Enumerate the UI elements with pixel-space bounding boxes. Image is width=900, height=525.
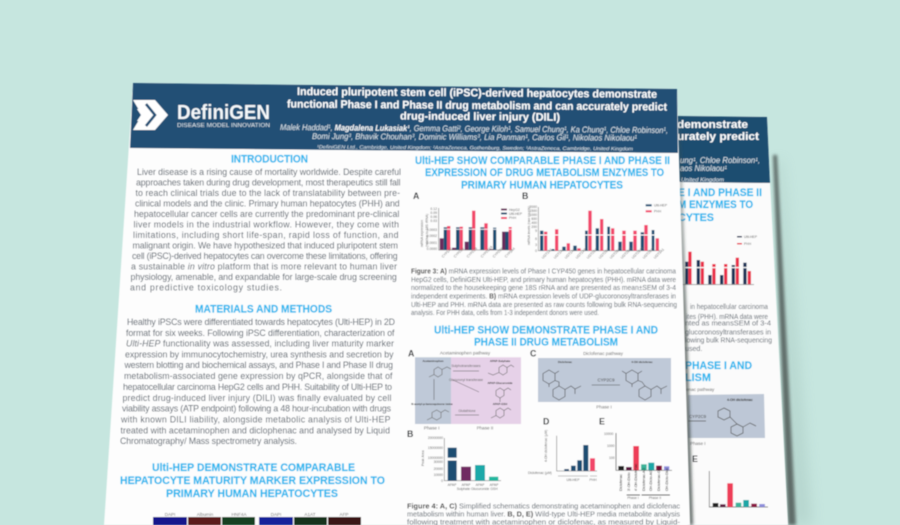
back poster caption: used. <box>685 345 702 353</box>
logo wordmark: DefiniGEN <box>177 101 270 124</box>
heading: drug metabolism <box>434 324 658 348</box>
chart B: peak area: APAP <box>490 483 499 487</box>
chart E: metabolite levels: Diclofenac <box>619 474 623 491</box>
figure 3 caption <box>411 268 677 317</box>
poster shadows <box>773 155 812 525</box>
chart B: UGT expression: 3 <box>535 243 537 247</box>
materials and methods text: Healthy iPSCs were differentiated towards hepatocytes (Ulti-HEP) in 2D <box>127 317 395 327</box>
chart B: peak area: GSH <box>490 487 498 491</box>
chart B: UGT expression: UGT3A1 <box>653 247 665 260</box>
schematic A: acetaminophen pathway: Sulphotransferases <box>451 364 481 368</box>
microscopy image row: AFP <box>340 512 348 517</box>
chart B: peak area: 0 <box>441 479 443 483</box>
poster title: Induced pluripotent stem cell (iPSC)-derived hepatocytes demonstrate <box>297 86 657 101</box>
back poster heading 2: LISM <box>685 372 711 384</box>
materials and methods text: western blotting and biochemical assays, and Phase I and Phase II drug <box>124 360 393 370</box>
chart B: peak area: Peak Area <box>421 450 425 466</box>
back poster bar chart: PHH <box>744 242 752 246</box>
schematic C: diclofenac pathway: Diclofenac pathway <box>583 351 624 356</box>
introduction text: malignant origin. We have hypothesized that induced pluripotent stem <box>132 240 398 250</box>
schematic A: acetaminophen pathway: APAP-Glucuronide <box>488 381 513 385</box>
chart A: CYP450 expression: CYP2C19 <box>480 245 493 259</box>
figure 3 caption: Figure 3: A) mRNA expression levels of Phase I CYP450 genes in hepatocellular carcinoma <box>411 268 676 276</box>
chart B: UGT expression: UGT2B7 <box>598 247 610 260</box>
schematic C: diclofenac pathway: CYP2C9 <box>597 378 615 382</box>
chart E: metabolite levels: Phase I <box>627 496 639 500</box>
chart D: diclofenac dose: Diclofenac (µM) <box>528 471 552 475</box>
chart B: UGT expression: PHH <box>654 210 662 214</box>
chart A: CYP450 expression: 0.0000 <box>427 247 437 251</box>
chart B: UGT expression: UGT1A1 <box>541 247 553 260</box>
panel: maturity markers <box>120 462 385 525</box>
chart D: diclofenac dose: PHH <box>589 478 597 482</box>
chart A: CYP450 expression: 0.06 <box>430 215 437 219</box>
back poster header: United Kingdom <box>681 178 724 184</box>
introduction text: hepatocellular cancer cells are currently the predominant pre-clinical <box>134 209 399 219</box>
back poster caption: glucoronosyltransferases in <box>685 328 771 336</box>
chart E: metabolite levels <box>599 416 672 500</box>
heading: maturity markers: PRIMARY HUMAN HEPATOCYTES <box>166 488 338 500</box>
heading: expression: PRIMARY HUMAN HEPATOCYTES <box>461 180 623 192</box>
schematic C: diclofenac pathway: C <box>530 348 537 358</box>
introduction text: to reach clinical trials due to the lack of translatability between pre- <box>136 188 400 198</box>
chart B: peak area: APAP <box>476 483 485 487</box>
materials and methods text: predict drug-induced liver injury (DILI) was finally evaluated by cell <box>122 393 392 403</box>
back poster header: urately predict <box>677 131 759 143</box>
header band <box>130 83 678 153</box>
chart B: UGT expression: 2000 <box>529 205 537 209</box>
chart D: diclofenac dose <box>528 416 597 482</box>
back poster chart E <box>692 454 768 507</box>
materials and methods text: with known DILI liability, alongside metabolic analysis of Ulti-HEP <box>120 414 391 424</box>
materials and methods text: hepatocellular carcinoma HepG2 cells and PHH. Suitability of Ulti-HEP to <box>123 382 392 392</box>
introduction text: and predictive toxicology studies. <box>130 282 282 292</box>
back poster header: ung¹, Chloe Robinson¹, <box>680 155 760 165</box>
back poster heading: M ENZYMES TO <box>678 199 753 211</box>
back poster heading <box>678 187 762 224</box>
chart B: peak area: 30000 <box>434 460 443 464</box>
back poster pathway box: enac pathway <box>686 387 715 392</box>
introduction text: a sustainable in vitro platform that is more relevant to human liver <box>131 262 397 272</box>
back poster heading 2: PHASE I AND <box>685 360 752 372</box>
materials and methods text: expression by immunocytochemistry, urea synthesis and secretion by <box>125 350 394 360</box>
chart D: diclofenac dose: 4-OH diclofenac (µM) <box>544 430 548 462</box>
panel: drug metabolism <box>407 324 681 525</box>
schematic A: acetaminophen pathway: N-acetyl-p-benzoquinone imine <box>411 402 453 406</box>
front poster <box>104 83 690 525</box>
schematic A: acetaminophen pathway: Phase II <box>477 426 493 430</box>
back poster pathway box: CYP2C9 <box>689 414 707 419</box>
chart B: UGT expression: UGT2B10 <box>609 246 622 260</box>
chart E: metabolite levels: 4'-OH-Diclofenac <box>634 464 638 491</box>
heading: drug metabolism: Ulti-HEP SHOW DEMONSTRATE PHASE I AND <box>434 324 658 336</box>
chart B: UGT expression: 200 <box>531 225 537 229</box>
schematic C: diclofenac pathway <box>530 348 671 410</box>
heading: drug metabolism: PHASE II DRUG METABOLISM <box>474 336 618 348</box>
microscopy image row: A1AT <box>304 512 316 517</box>
chart A: CYP450 expression: PHH <box>509 216 517 220</box>
chart B: peak area: 20000 <box>434 467 443 471</box>
chart E: metabolite levels: OH-Diclo-AG <box>649 470 653 491</box>
back poster header: aos Nikolaou¹ <box>680 163 727 173</box>
microscopy image row: DAPI <box>165 512 175 517</box>
poster title: drug-induced liver injury (DILI) <box>400 111 560 124</box>
chart B: UGT expression: mRNA levels (raw counts) <box>527 206 531 245</box>
chart A: CYP450 expression: 0.12 <box>430 207 437 211</box>
panel: introduction <box>130 154 401 292</box>
back poster heading 2 <box>685 360 752 384</box>
chart B: peak area: Sulphate Glucuronide <box>457 487 489 491</box>
heading: materials and methods: MATERIALS AND METHODS <box>195 304 332 316</box>
figure 3 caption: Ulti-HEP and PHH. mRNA data are presented as raw counts following bulk RNA-sequencing <box>411 301 677 309</box>
heading: maturity markers: Ulti-HEP DEMONSTRATE COMPARABLE <box>152 462 355 474</box>
schematic C: diclofenac pathway: 4-OH diclofenac <box>631 360 653 364</box>
chart A: CYP450 expression: mRNA expression <box>420 220 424 247</box>
back poster bar chart: Ulti-HEP <box>744 235 758 239</box>
schematic A: acetaminophen pathway: Glutathione <box>458 409 476 413</box>
materials and methods text: format for six weeks. Following iPSC differentiation, characterization of <box>126 328 395 338</box>
panel: materials and methods <box>120 304 395 446</box>
chart B: UGT expression: 0 <box>535 249 537 253</box>
figure 3 caption: normalized to the housekeeping gene 18S rRNA and are presented as mean±SEM of 3-4 <box>411 284 676 292</box>
chart E: metabolite levels: 10000 <box>604 432 614 436</box>
schematic A: acetaminophen pathway: Acetaminophen <box>423 359 444 363</box>
chart B: peak area: 15000000 <box>428 446 443 450</box>
introduction text: physiology, amenable, and expandable for large-scale drug screening <box>130 272 397 282</box>
figure 3 caption: independent experiments. B) mRNA expression levels of UDP-glucoronosyltransferases in <box>411 292 676 300</box>
back poster bar chart <box>682 235 758 285</box>
chart A: CYP450 expression: CYP3A4 <box>504 247 516 259</box>
chart A: CYP450 expression: 0.03 <box>430 219 437 223</box>
chart E: metabolite levels: Diclofenac-Gluc <box>657 465 661 491</box>
back poster header: demonstrate <box>677 119 748 131</box>
microscopy image row: DAPI <box>271 512 281 517</box>
microscopy image row <box>153 512 361 525</box>
introduction text <box>130 167 401 292</box>
chart A: CYP450 expression: 0.09 <box>430 211 437 215</box>
chart D: diclofenac dose: D <box>543 416 549 426</box>
chart B: UGT expression: 400 <box>531 221 537 225</box>
chart A: CYP450 expression: (relative to 18S rRNA) <box>425 214 429 247</box>
back poster caption: nted as meansSEM of 3-4 <box>685 320 771 328</box>
chart B: UGT expression: UGT1A9 <box>575 247 587 260</box>
materials and methods text: metabolism-associated gene expression by qPCR, alongside that of <box>124 371 393 381</box>
figure 4 caption <box>407 502 681 525</box>
chart E: metabolite levels: 100 <box>609 456 615 460</box>
chart E: metabolite levels: 3'-OH-Diclo <box>627 473 631 491</box>
introduction text: approaches taken during drug development, most therapeutics still fall <box>136 178 401 188</box>
materials and methods text: Ulti-HEP functionality was assessed, including liver maturity marker <box>126 338 394 348</box>
chart A: CYP450 expression <box>413 191 523 259</box>
figure 4 caption: metabolism within human liver. B, D, E) Wild-type Ulti-HEP media metabolite analysis <box>407 510 680 518</box>
chart B: peak area: 20000000 <box>428 436 443 440</box>
heading: expression: EXPRESSION OF DRUG METABOLISM ENZYMES TO <box>425 167 664 179</box>
back poster chart E: E <box>692 454 698 464</box>
back poster caption: ites (PHH). mRNA data were <box>686 313 768 321</box>
chart E: metabolite levels: E <box>599 416 605 426</box>
authors: Malek Haddad¹, Magdalena Lukasiak¹, Gemma Gatti², George Kiloh¹, Samuel Chung¹, Ka Chung¹, Chloe Robinson¹, <box>280 122 668 135</box>
back poster heading: E I AND PHASE II <box>678 187 762 199</box>
chart B: UGT expression: 1500 <box>529 209 537 213</box>
schematic A: acetaminophen pathway: APAP-Sulphate <box>490 359 511 363</box>
materials and methods text: Chromatography/ Mass spectrometry analysis. <box>120 436 297 446</box>
chart B: UGT expression: 600 <box>531 217 537 221</box>
schematic A: acetaminophen pathway: Acetaminophen pathway <box>440 350 491 356</box>
heading: maturity markers: HEPATOCYTE MATURITY MARKER EXPRESSION TO <box>120 475 385 487</box>
chart B: UGT expression: UGT2B17 <box>642 246 655 260</box>
heading: maturity markers <box>120 462 385 500</box>
back poster caption: in hepatocellular carcinoma <box>690 303 768 311</box>
chart B: UGT expression: Ulti-HEP <box>654 204 668 208</box>
chart A: CYP450 expression: CYP1A2 <box>441 247 453 259</box>
schematic A: acetaminophen pathway: Glucuronyl transferase <box>449 378 483 382</box>
chart E: metabolite levels: Diclofenac-AG <box>642 468 646 491</box>
chart A: CYP450 expression: HepG2 <box>509 208 520 212</box>
chart B: UGT expression: UGT1A4 <box>553 247 565 260</box>
chart B: peak area: 10000000 <box>428 456 443 460</box>
schematic A: acetaminophen pathway: APAP-GSH <box>493 402 507 406</box>
poster title: functional Phase I and Phase II drug metabolism and can accurately predict <box>287 99 667 113</box>
chart E: metabolite levels: OH-Diclo-Gluc <box>665 468 669 491</box>
authors <box>280 122 668 143</box>
chart A: CYP450 expression: 0.0003 <box>427 228 437 232</box>
heading: expression: Ulti-HEP SHOW COMPARABLE PHASE I AND PHASE II <box>415 155 670 167</box>
heading: introduction: INTRODUCTION <box>231 154 308 166</box>
microscopy image row: Albumin <box>197 512 214 517</box>
schematic A: acetaminophen pathway: A <box>408 348 415 358</box>
chart A: CYP450 expression: 0.0002 <box>427 234 437 238</box>
chart D: diclofenac dose: Ulti-HEP <box>566 478 580 482</box>
introduction text: clinical models and the clinic. Primary human hepatocytes (PHH) and <box>135 198 400 208</box>
microscopy image row: HNF4A <box>231 512 247 517</box>
schematic A: acetaminophen pathway: Phase I <box>424 426 439 430</box>
materials and methods text: viability assays (ATP endpoint) following a 48 hour-incubation with drugs <box>122 404 392 414</box>
chart B: peak area <box>407 429 501 491</box>
back poster pathway box <box>686 387 765 446</box>
chart A: CYP450 expression: Ulti-HEP <box>509 212 523 216</box>
chart B: UGT expression: B <box>522 191 528 201</box>
affiliations: ¹DefiniGEN Ltd., Cambridge, United Kingdom; ²AstraZeneca, Gothenburg, Sweden; ³AstraZeneca, Cambridge, United Kingdom <box>317 145 633 152</box>
chart B: UGT expression: UGT2B11 <box>620 246 633 260</box>
chart B: peak area: 10000 <box>434 473 443 477</box>
back poster caption: lowing bulk RNA-sequencing <box>685 336 772 344</box>
chart B: UGT expression: 9 <box>535 229 537 233</box>
chart A: CYP450 expression: A <box>413 191 420 201</box>
materials and methods text: treated with acetaminophen and diclophenac and analysed by Liquid <box>120 426 390 436</box>
introduction text: limitations, including short life-span, rapid loss of function, and <box>133 230 399 240</box>
back poster heading: CYTES <box>678 212 714 224</box>
schematic C: diclofenac pathway: Phase I <box>596 404 612 410</box>
chart B: UGT expression: 6 <box>535 237 537 241</box>
chart B: UGT expression: UGT2B4 <box>586 247 598 260</box>
introduction text: liver models in the industrial workflow. However, they come with <box>134 220 399 230</box>
panel: phase I and II expression <box>411 155 677 317</box>
introduction text: Liver disease is a rising cause of mortality worldwide. Despite careful <box>137 167 401 177</box>
materials and methods text <box>120 317 395 446</box>
figure 3 caption: HepG2 cells, DefiniGEN Ulti-HEP, and primary human hepatocytes (PHH). mRNA data were <box>411 276 676 284</box>
back poster pathway box: Phase I <box>690 441 706 446</box>
chart B: UGT expression: UGT2B15 <box>631 246 644 260</box>
chart B: UGT expression: UGT1A6 <box>564 247 576 260</box>
figure 4 caption: Figure 4: A, C) Simplified schematics demonstrating acetaminophen and diclofenac <box>407 502 680 510</box>
chart B: peak area: B <box>407 429 413 439</box>
chart A: CYP450 expression: CYP2B6 <box>453 247 465 259</box>
schematic C: diclofenac pathway: Diclofenac <box>558 360 573 364</box>
chart A: CYP450 expression: 0.0001 <box>427 241 437 245</box>
back poster caption <box>685 303 772 353</box>
chart A: CYP450 expression: CYP2C9 <box>466 246 478 259</box>
chart B: peak area: APAP <box>448 483 457 487</box>
authors: Bomi Jung³, Bhavik Chouhan³, Dominic Williams³, Lia Panman¹, Carlos Gil¹, Nikolaos Nikolaou¹ <box>312 131 637 143</box>
figure 3 caption: analysis. For PHH data, cells from 1-3 independent donors were used. <box>411 309 599 317</box>
chart E: metabolite levels: Phase II <box>649 496 661 500</box>
logo wordmark: DISEASE MODEL INNOVATION <box>177 123 270 129</box>
poster title <box>287 86 667 124</box>
chart B: peak area: APAP <box>462 483 471 487</box>
front poster shadow on back poster <box>677 117 693 525</box>
back poster pathway box: 4-OH diclofenac <box>727 398 753 402</box>
chart A: CYP450 expression: CYP2D6 <box>492 246 504 259</box>
icon: DefiniGEN chevron logo <box>133 100 168 130</box>
chart B: UGT expression: 1000 <box>529 213 537 217</box>
chart B: UGT expression <box>522 191 668 260</box>
chart E: metabolite levels: 1000 <box>607 444 615 448</box>
introduction text: cell (iPSC)-derived hepatocytes can overcome these limitations, offering <box>132 251 398 261</box>
heading: expression <box>415 155 670 192</box>
back poster header <box>677 116 770 184</box>
schematic A: acetaminophen pathway <box>408 348 521 430</box>
back poster <box>677 116 788 525</box>
